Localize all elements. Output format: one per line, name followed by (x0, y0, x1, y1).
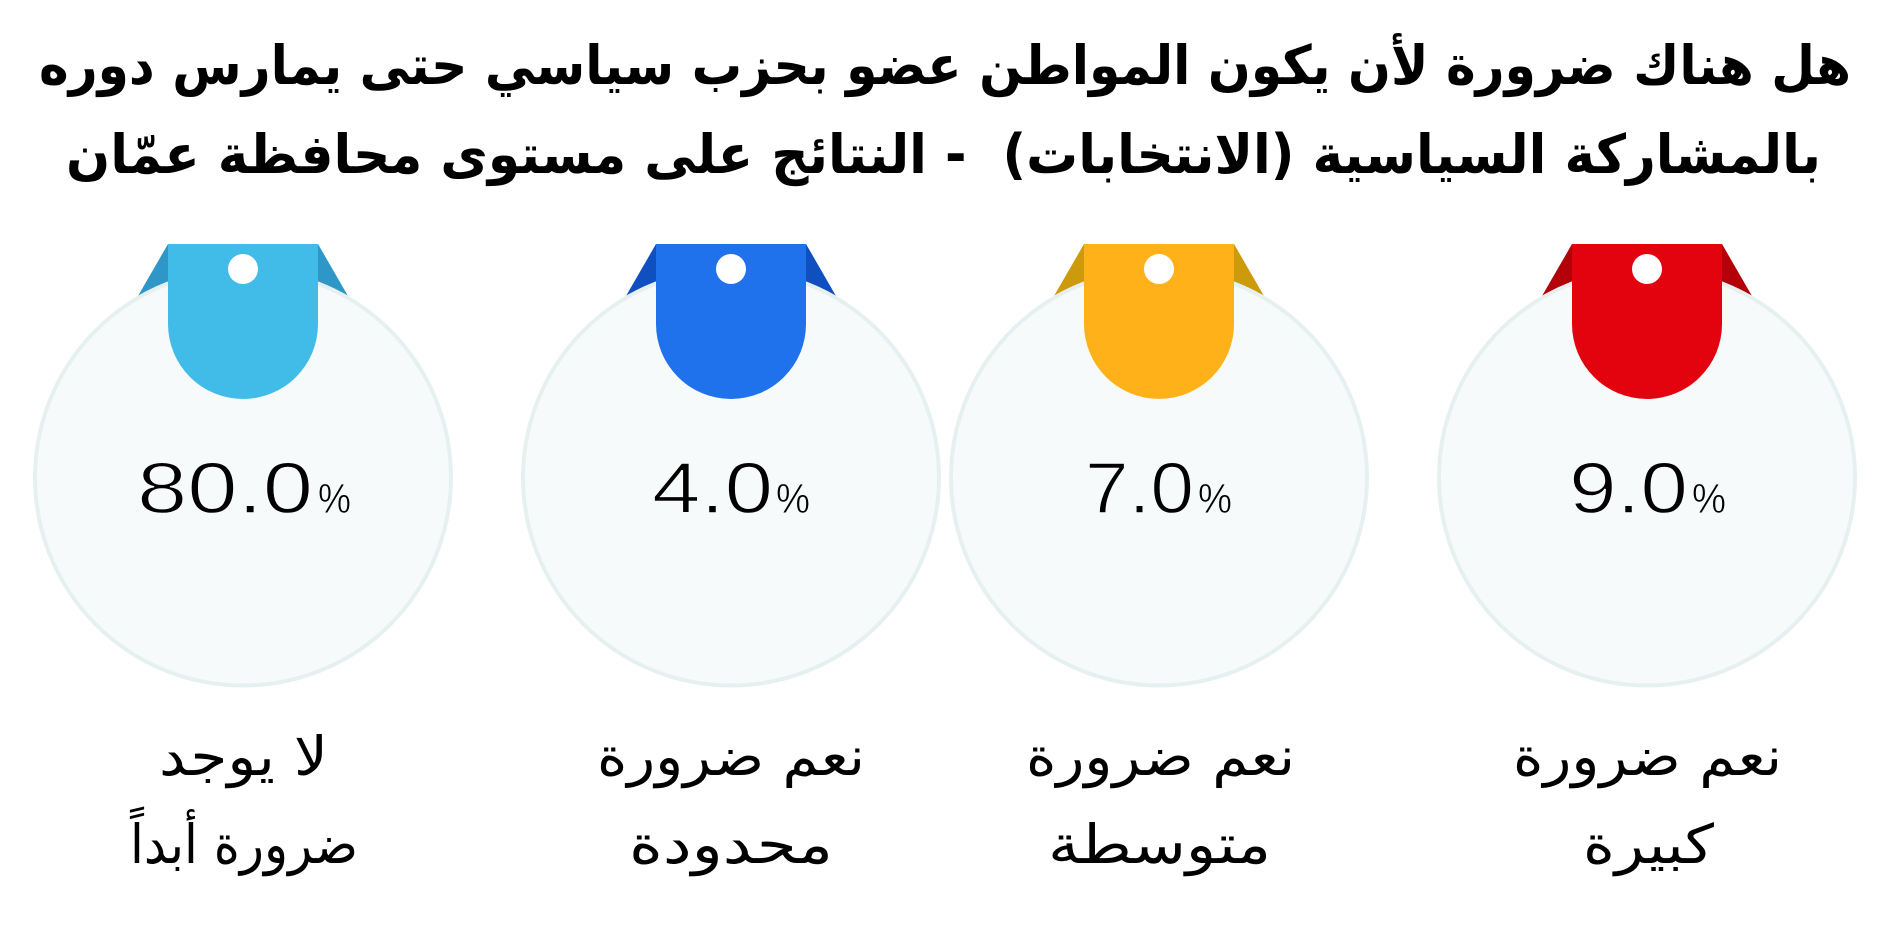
value: % (318, 475, 351, 522)
label: كبيرة (1583, 813, 1714, 876)
ribbon folds (626, 244, 836, 296)
circle (35, 270, 451, 686)
title: بالمشاركة السياسية (الانتخابات) - النتائج على مستوى محافظة عمّان (66, 123, 1821, 186)
tag hole (228, 254, 258, 284)
label: محدودة (629, 813, 833, 876)
circle (523, 270, 939, 686)
value: 9.0 (1569, 449, 1688, 529)
title (39, 33, 1851, 186)
panel: limited need 4% (523, 244, 939, 876)
circle (1439, 270, 1855, 686)
ribbon folds (1542, 244, 1752, 296)
label: متوسطة (1048, 813, 1271, 876)
value: % (1198, 475, 1232, 522)
value: 80.0 (137, 449, 313, 529)
label (1026, 725, 1295, 876)
ribbon folds (138, 244, 348, 296)
tag hole (716, 254, 746, 284)
panel: no need at all 80% (35, 244, 451, 876)
label: لا يوجد (159, 725, 328, 788)
label: نعم ضرورة (1513, 725, 1782, 788)
tag (656, 244, 806, 399)
label (1513, 725, 1782, 876)
value (137, 449, 351, 529)
tag (168, 244, 318, 399)
value (1569, 449, 1726, 529)
label: نعم ضرورة (1026, 725, 1295, 788)
label: ضرورة أبداً (129, 806, 358, 876)
tag hole (1144, 254, 1174, 284)
label (129, 725, 358, 876)
value: 4.0 (652, 449, 773, 529)
panel: moderate need 7% (951, 244, 1367, 876)
label: نعم ضرورة (597, 725, 865, 788)
ribbon folds (1054, 244, 1264, 296)
value: % (776, 475, 810, 522)
value: % (1692, 475, 1726, 522)
value (1085, 449, 1232, 529)
value: 7.0 (1085, 449, 1194, 529)
label (597, 725, 865, 876)
tag (1572, 244, 1722, 399)
tag hole (1632, 254, 1662, 284)
circle (951, 270, 1367, 686)
value (652, 449, 810, 529)
panel: great need 9% (1439, 244, 1855, 876)
tag (1084, 244, 1234, 399)
